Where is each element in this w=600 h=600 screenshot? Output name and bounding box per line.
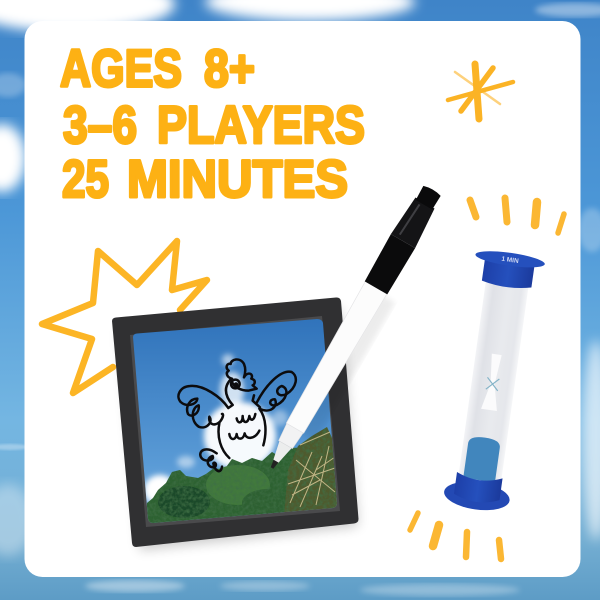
breast feathers [237, 414, 255, 422]
bottom disc [442, 478, 511, 514]
marker pen [260, 183, 454, 480]
icon: starburst outline [42, 241, 207, 393]
bottom collar [453, 472, 503, 505]
tip cone [270, 441, 292, 465]
sparks above timer [470, 198, 564, 233]
trees [147, 427, 337, 523]
tablet frame [112, 297, 358, 547]
black cap [364, 234, 415, 295]
heading: ages, players, minutes: 25 [62, 150, 109, 209]
sand timer [440, 248, 546, 514]
icon: asterisk doodle [448, 64, 513, 119]
sparks below timer [410, 513, 501, 559]
lower wing [200, 449, 222, 471]
clouds [144, 354, 288, 505]
collar [277, 423, 303, 449]
heading: ages, players, minutes: 8+ [204, 40, 255, 98]
tablet with sky photo and drawing [112, 297, 358, 550]
screen photo [133, 319, 337, 523]
palm fronds [288, 432, 338, 507]
heading: ages, players, minutes: PLAYERS [157, 96, 365, 155]
heading: ages, players, minutes: AGES [60, 40, 182, 98]
bird doodle [178, 359, 296, 471]
cap label: 1 MIN [501, 256, 519, 265]
white barrel [284, 280, 388, 434]
glass tube [459, 272, 530, 481]
screen bevel [130, 316, 340, 527]
heading: ages, players, minutes [60, 40, 365, 209]
top disc [475, 248, 546, 271]
tablet shadow [120, 308, 358, 550]
crest and head [227, 359, 257, 391]
body and left wing [178, 379, 233, 458]
heading: ages, players, minutes: MINUTES [127, 150, 348, 209]
nib [269, 458, 280, 470]
right wing [257, 372, 296, 445]
blue sand [463, 435, 501, 482]
neck [481, 353, 505, 411]
heading: ages, players, minutes: 3–6 [63, 96, 137, 155]
pen shadow [300, 293, 395, 441]
top collar [481, 254, 535, 291]
